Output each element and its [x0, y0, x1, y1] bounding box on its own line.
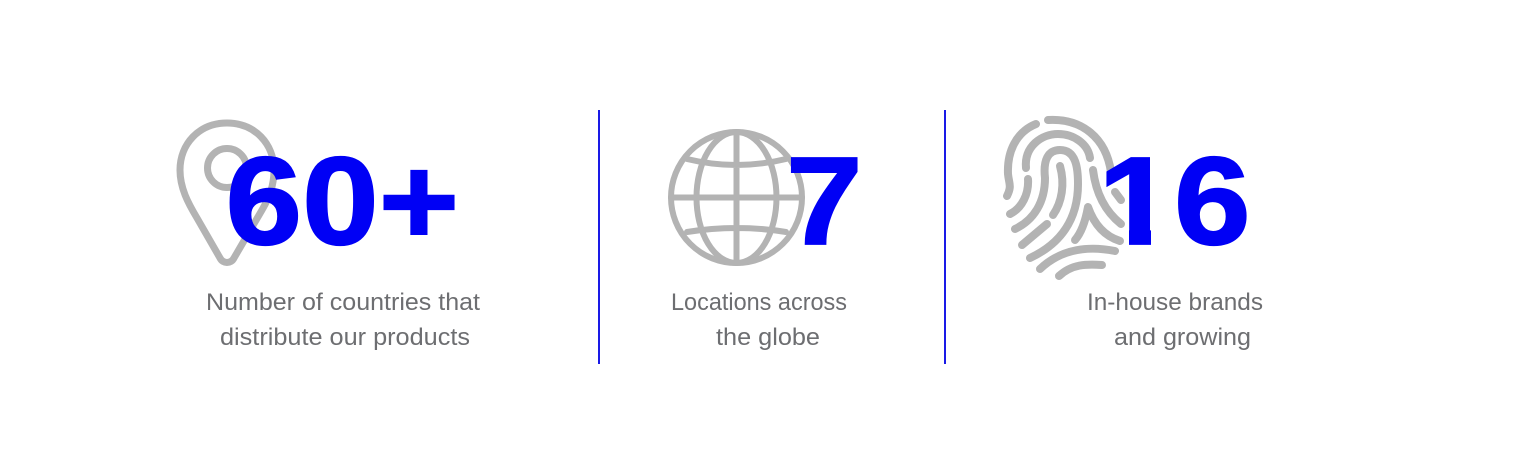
panel: locations: [671, 131, 863, 351]
stat: 7: 7: [786, 131, 863, 271]
caption: brands: and growing: [1114, 324, 1251, 351]
caption: countries: [206, 289, 480, 351]
stat: 16: 1: [1098, 131, 1175, 271]
stat: 16: [1106, 156, 1247, 246]
caption: locations: [671, 289, 847, 351]
stat: 16: 6: [1174, 131, 1251, 271]
icon: map pin: [180, 123, 274, 262]
caption: locations: the globe: [716, 324, 820, 351]
icon: globe: [671, 132, 802, 263]
caption: countries: distribute our products: [220, 324, 470, 351]
divider: left: [598, 110, 600, 364]
panel: brands: [1007, 120, 1263, 351]
caption: countries: Number of countries that: [206, 289, 480, 316]
icon: fingerprint: [1007, 120, 1121, 276]
caption: locations: Locations across: [671, 289, 847, 316]
divider: right: [944, 110, 946, 364]
caption: brands: [1087, 289, 1263, 351]
caption: brands: In-house brands: [1087, 289, 1263, 316]
panel: countries: [180, 123, 480, 351]
stat: 60+: 60+: [226, 131, 459, 271]
